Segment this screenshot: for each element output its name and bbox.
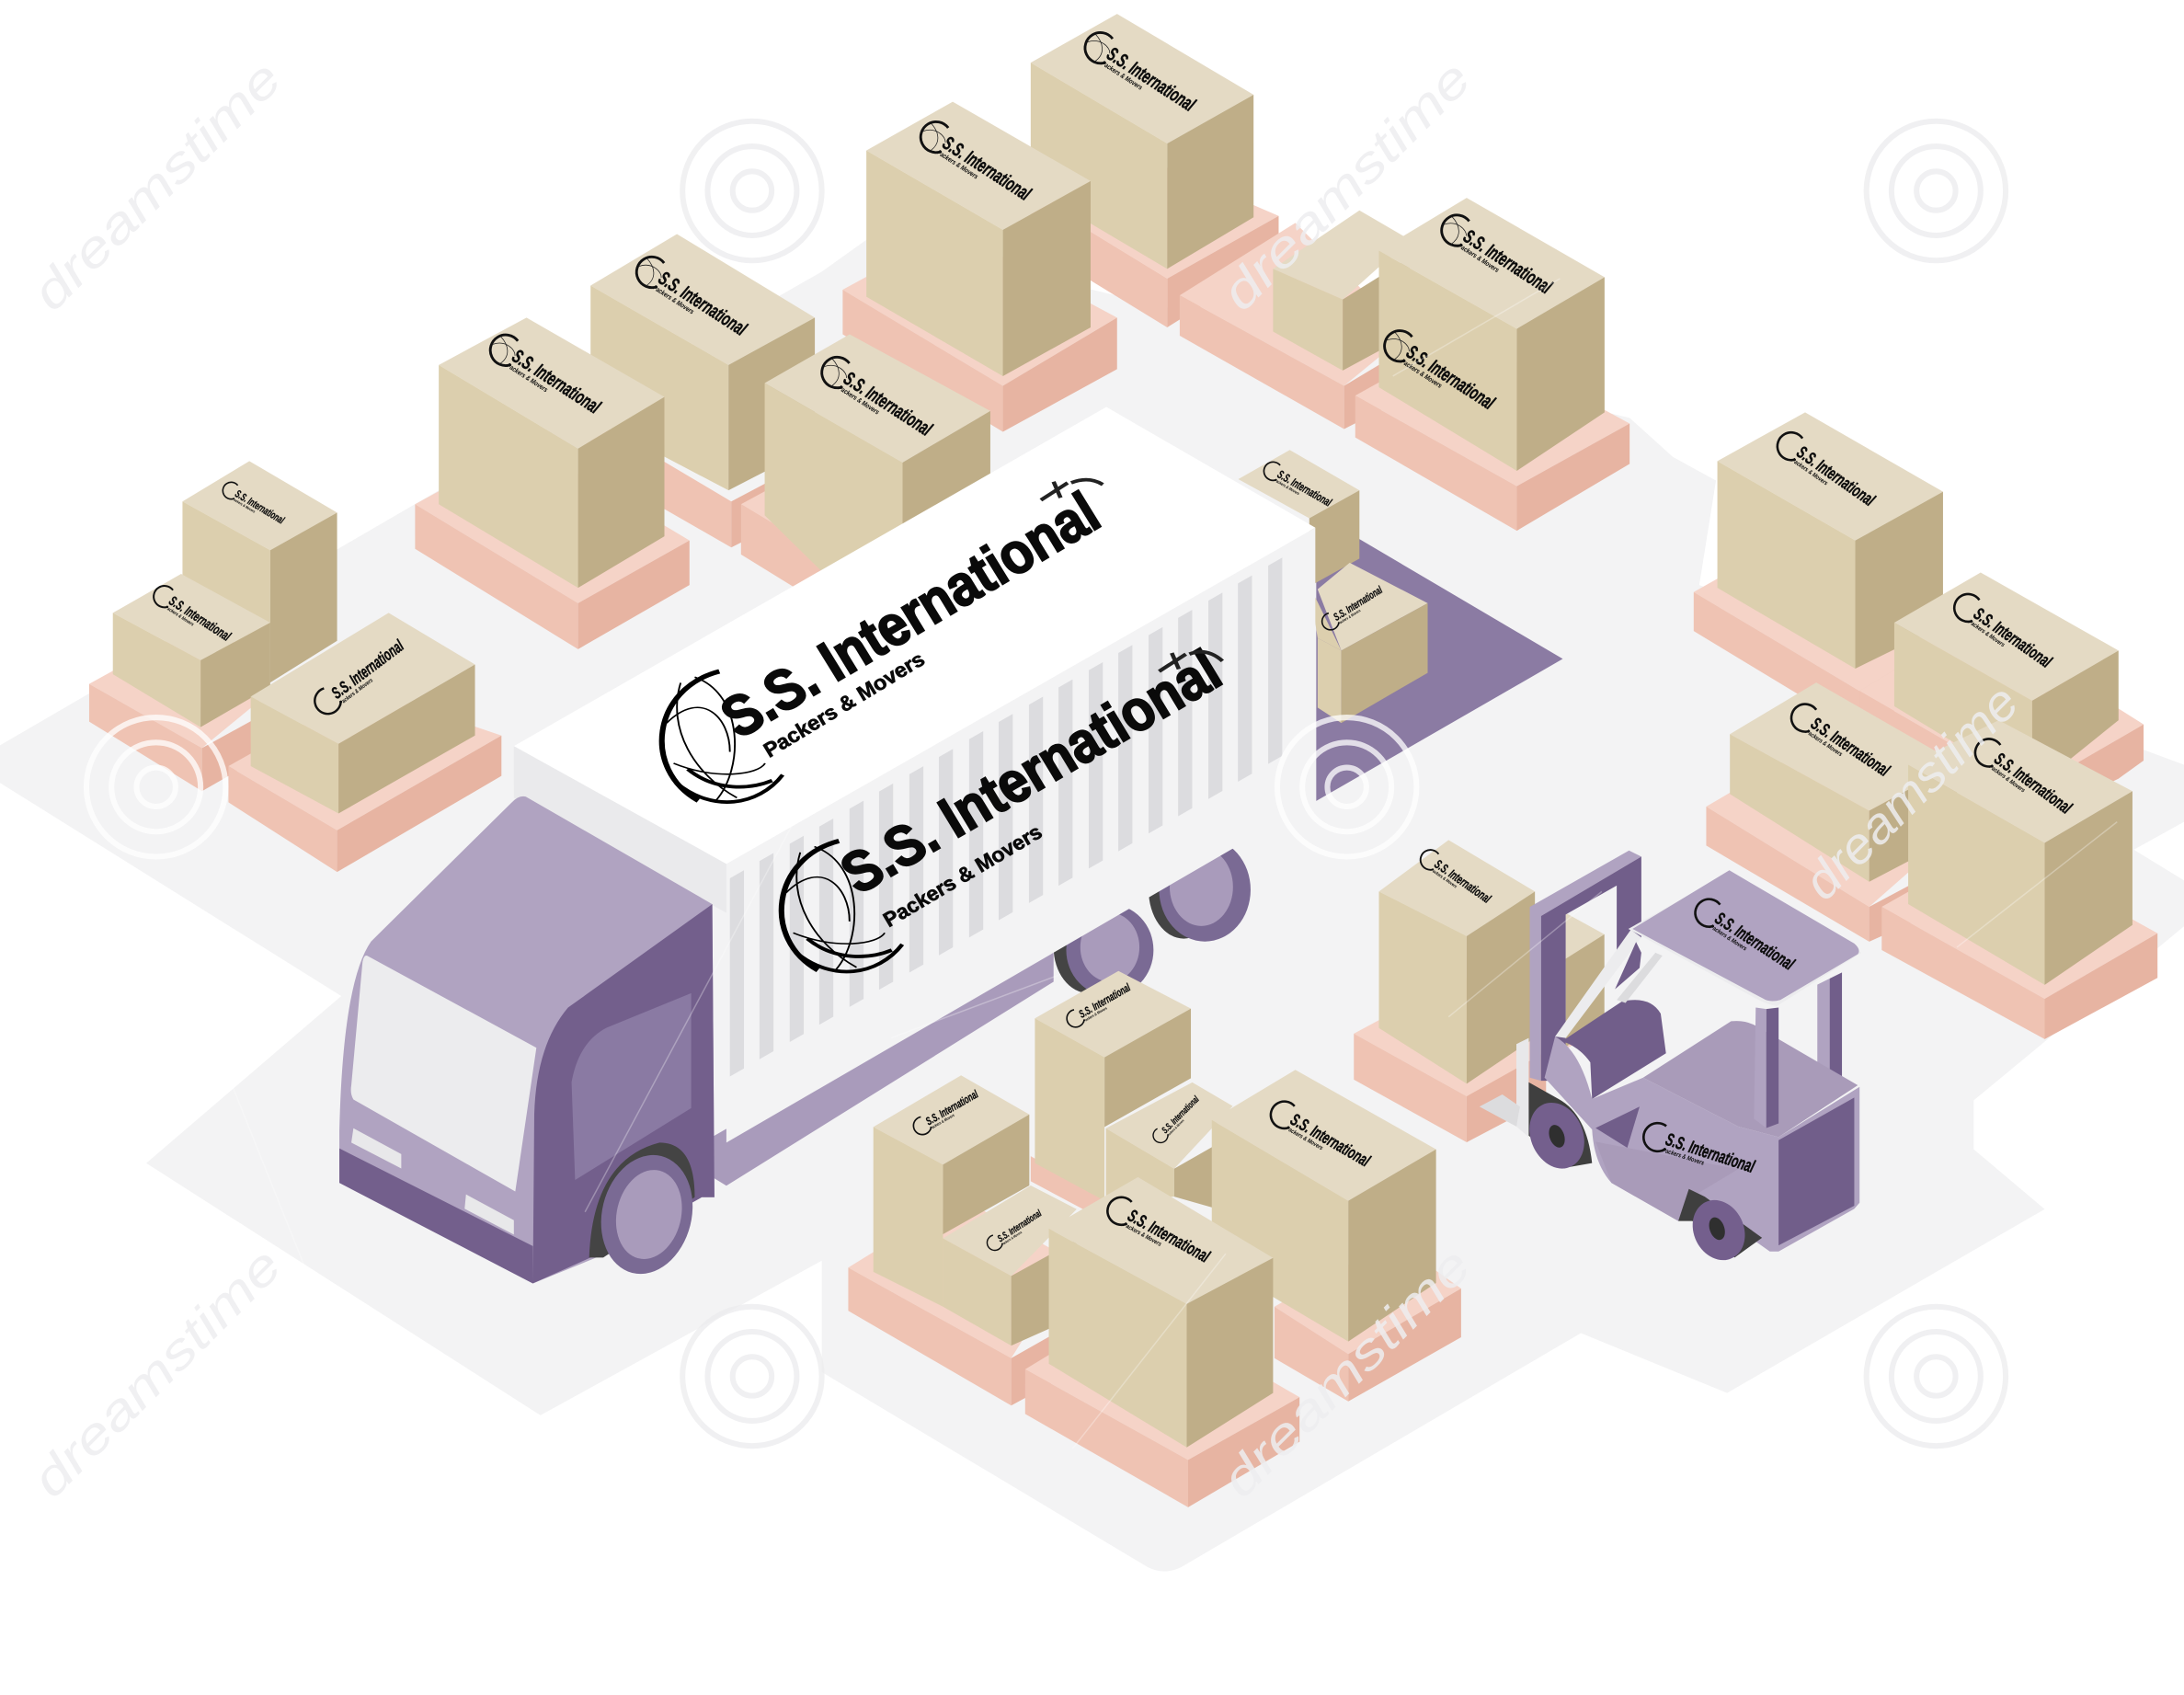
bottom group: right box and pallet bbox=[1212, 1070, 1461, 1402]
container ribs bbox=[730, 557, 1282, 1077]
cab lower front bbox=[339, 1149, 532, 1284]
box logo: mat box lower bbox=[1319, 582, 1387, 633]
bottom group: left stacked boxes and pallet bbox=[848, 1075, 1077, 1405]
box logo: top centre left: S.S. International bbox=[939, 132, 1035, 205]
box logo: bottom left upper: Packers & Movers bbox=[929, 1113, 955, 1130]
box logo: left of truck bbox=[485, 329, 607, 423]
box logo: bottom right: Packers & Movers bbox=[1285, 1126, 1324, 1151]
bottom group: tall box and box beside it bbox=[1031, 971, 1232, 1226]
box logo: top centre: Packers & Movers bbox=[1100, 59, 1144, 92]
box logo: top right: Packers & Movers bbox=[1457, 242, 1501, 274]
box logo: left of truck: S.S. International bbox=[509, 346, 604, 418]
pallet and large box: top right bbox=[1355, 198, 1629, 531]
box logo: left stack lower: S.S. International bbox=[166, 594, 234, 645]
pallet and box stack: top centre bbox=[1031, 14, 1278, 327]
box logo: bottom tall: S.S. International bbox=[1077, 980, 1133, 1021]
box logo: left stack lower bbox=[149, 582, 235, 648]
box logo: top right bbox=[1435, 210, 1558, 303]
pallet and box stack: top centre left bbox=[842, 102, 1117, 432]
box logo: right low bbox=[1949, 589, 2057, 676]
cab side bbox=[532, 904, 715, 1284]
warehouse floor bbox=[0, 236, 2184, 1572]
box logo: bottom behind: S.S. International bbox=[1161, 1094, 1202, 1136]
box logo: bottom right: S.S. International bbox=[1287, 1109, 1374, 1171]
box logo: right middle: Packers & Movers bbox=[1804, 729, 1844, 758]
purple loading mat bbox=[1316, 539, 1562, 801]
headlights bbox=[351, 1128, 514, 1234]
box logo: bottom left upper: S.S. International bbox=[923, 1087, 980, 1128]
box logo: right front: Packers & Movers bbox=[1987, 763, 2026, 794]
chassis bbox=[713, 942, 1054, 1185]
box logo: behind truck: S.S. International bbox=[840, 368, 936, 441]
watermark text: dreamstime bbox=[1793, 674, 2030, 910]
container front bbox=[514, 746, 726, 912]
watermark text bbox=[21, 50, 2030, 1508]
box logo: top centre: S.S. International bbox=[1103, 43, 1199, 116]
watermark text: dreamstime bbox=[21, 50, 292, 321]
fork bbox=[1480, 1038, 1528, 1137]
forklift body logo bbox=[1640, 1119, 1758, 1182]
forklift canopy logo: S.S. International bbox=[1711, 909, 1798, 975]
box logo: left stack upper: S.S. International bbox=[233, 487, 287, 527]
forklift body logo: S.S. International bbox=[1663, 1129, 1757, 1177]
container top bbox=[514, 407, 1315, 864]
watermark crossing lines bbox=[189, 279, 2117, 1449]
box logo: right middle: S.S. International bbox=[1807, 715, 1893, 781]
watermark spirals bbox=[86, 121, 2006, 1446]
box logo: left low box: Packers & Movers bbox=[338, 677, 374, 706]
box logo: top centre left bbox=[915, 116, 1037, 210]
box logo: bottom left lower: S.S. International bbox=[996, 1208, 1044, 1244]
box logo: mat box upper: Packers & Movers bbox=[1274, 478, 1300, 496]
box logo: mat box upper: S.S. International bbox=[1275, 467, 1334, 510]
rear wheels bbox=[1054, 838, 1251, 996]
box logo: left stack upper bbox=[220, 479, 288, 529]
mast bbox=[1530, 851, 1641, 1081]
box logo: forklift load: S.S. International bbox=[1432, 857, 1493, 906]
right group: low box and pallet bbox=[1859, 573, 2144, 822]
pallet and box: rear of truck bbox=[590, 234, 850, 547]
box logo: behind truck: Packers & Movers bbox=[837, 384, 881, 417]
box logo: left stack lower: Packers & Movers bbox=[164, 605, 195, 628]
box logo: bottom behind bbox=[1150, 1093, 1203, 1146]
right group: upper box and pallet bbox=[1694, 412, 1978, 731]
box logo: forklift load bbox=[1416, 846, 1495, 910]
box logo: left low box: S.S. International bbox=[328, 636, 407, 703]
box logo: forklift load: Packers & Movers bbox=[1429, 867, 1458, 890]
container side bbox=[726, 528, 1315, 1142]
box logo: bottom tall bbox=[1064, 979, 1135, 1030]
rear canopy post bbox=[1817, 972, 1842, 1093]
box logo: right front: S.S. International bbox=[1990, 750, 2075, 819]
body top bbox=[1643, 1021, 1858, 1137]
box logo: left of truck: Packers & Movers bbox=[505, 361, 549, 394]
box logo: top centre left: Packers & Movers bbox=[935, 148, 980, 181]
box logo: bottom left upper bbox=[910, 1086, 982, 1138]
box logo: top right side face bbox=[1378, 325, 1501, 419]
forklift rear wheel bbox=[1678, 1189, 1762, 1266]
right group: front box and pallet bbox=[1881, 720, 2157, 1039]
box logo: mat box upper bbox=[1261, 459, 1335, 512]
box logo: bottom front: Packers & Movers bbox=[1122, 1221, 1162, 1248]
box logo: rear box bbox=[631, 251, 753, 345]
forklift body logo: Packers & Movers bbox=[1662, 1147, 1705, 1167]
forklift bbox=[1480, 851, 1861, 1266]
second box behind mast bbox=[1566, 913, 1605, 1048]
box logo: top right side face: S.S. International bbox=[1402, 341, 1499, 414]
box logo: top centre bbox=[1080, 27, 1201, 120]
roof logo: S.S. International bbox=[705, 483, 1116, 749]
body front bbox=[1545, 1036, 1859, 1252]
canopy bbox=[1629, 870, 1861, 1006]
pallet and tall box carried by forklift bbox=[1354, 840, 1574, 1142]
container side logo: Packers & Movers bbox=[877, 821, 1048, 931]
box logo: bottom right bbox=[1265, 1096, 1375, 1175]
pallet and small box: top right bbox=[1180, 211, 1410, 429]
box logo: left stack upper: Packers & Movers bbox=[232, 497, 257, 514]
box logo: bottom left lower: Packers & Movers bbox=[1001, 1231, 1023, 1246]
box logo: mat box lower: S.S. International bbox=[1332, 584, 1385, 624]
box logo: right upper: S.S. International bbox=[1793, 443, 1878, 510]
boxes on purple mat bbox=[1239, 450, 1428, 723]
windshield bbox=[351, 956, 536, 1192]
box logo: bottom left lower bbox=[984, 1206, 1046, 1254]
box logo: top right side face: Packers & Movers bbox=[1400, 357, 1444, 390]
watermark text: dreamstime bbox=[21, 1237, 292, 1508]
rear panel bbox=[1778, 1097, 1854, 1245]
watermark text: dreamstime bbox=[1210, 50, 1481, 321]
body dark triangle bbox=[1595, 1106, 1640, 1148]
box logo: bottom tall: Packers & Movers bbox=[1082, 1005, 1108, 1024]
forklift canopy logo: Packers & Movers bbox=[1709, 924, 1748, 953]
left low box on pallet bbox=[228, 613, 501, 872]
seat bbox=[1562, 1000, 1666, 1099]
box logo: right upper: Packers & Movers bbox=[1790, 457, 1829, 487]
bottom group: front box and pallet bbox=[1025, 1177, 1299, 1507]
box logo: rear box: Packers & Movers bbox=[651, 283, 696, 316]
front wheel bbox=[589, 1142, 702, 1278]
container side logo: S.S. International bbox=[825, 640, 1238, 904]
box logo: rear box: S.S. International bbox=[655, 268, 750, 340]
left box stack on pallet bbox=[89, 461, 337, 791]
pallet and box: left of truck bbox=[415, 317, 690, 649]
pallet and box: behind truck bbox=[741, 335, 990, 613]
roof logo: Packers & Movers bbox=[758, 648, 931, 762]
box logo: bottom front bbox=[1103, 1192, 1215, 1271]
front canopy post bbox=[1754, 1008, 1778, 1128]
box logo: bottom front: S.S. International bbox=[1125, 1207, 1213, 1267]
forklift front wheel bbox=[1521, 1082, 1593, 1174]
box logo: left low box bbox=[310, 634, 411, 719]
box logo: top right: S.S. International bbox=[1459, 226, 1556, 299]
windshield frame bbox=[1555, 930, 1663, 1038]
watermark text: dreamstime bbox=[1210, 1237, 1481, 1508]
box logo: behind truck bbox=[816, 351, 938, 445]
roof logo bbox=[662, 480, 1116, 802]
cab body bbox=[339, 796, 715, 1284]
box logo: right low: Packers & Movers bbox=[1967, 619, 2006, 648]
box logo: right upper bbox=[1772, 427, 1881, 515]
box logo: mat box lower: Packers & Movers bbox=[1337, 608, 1362, 625]
body shaded step bbox=[1595, 1141, 1738, 1221]
cab side window bbox=[572, 993, 692, 1180]
container side logo bbox=[782, 640, 1238, 971]
box logo: right front bbox=[1970, 734, 2077, 822]
box logo: bottom behind: Packers & Movers bbox=[1166, 1118, 1185, 1138]
forklift canopy logo bbox=[1690, 894, 1800, 979]
box logo: right middle bbox=[1786, 699, 1895, 785]
right group: middle box and pallet bbox=[1706, 682, 1957, 942]
truck bbox=[339, 407, 1315, 1284]
box logo: right low: S.S. International bbox=[1970, 604, 2055, 672]
